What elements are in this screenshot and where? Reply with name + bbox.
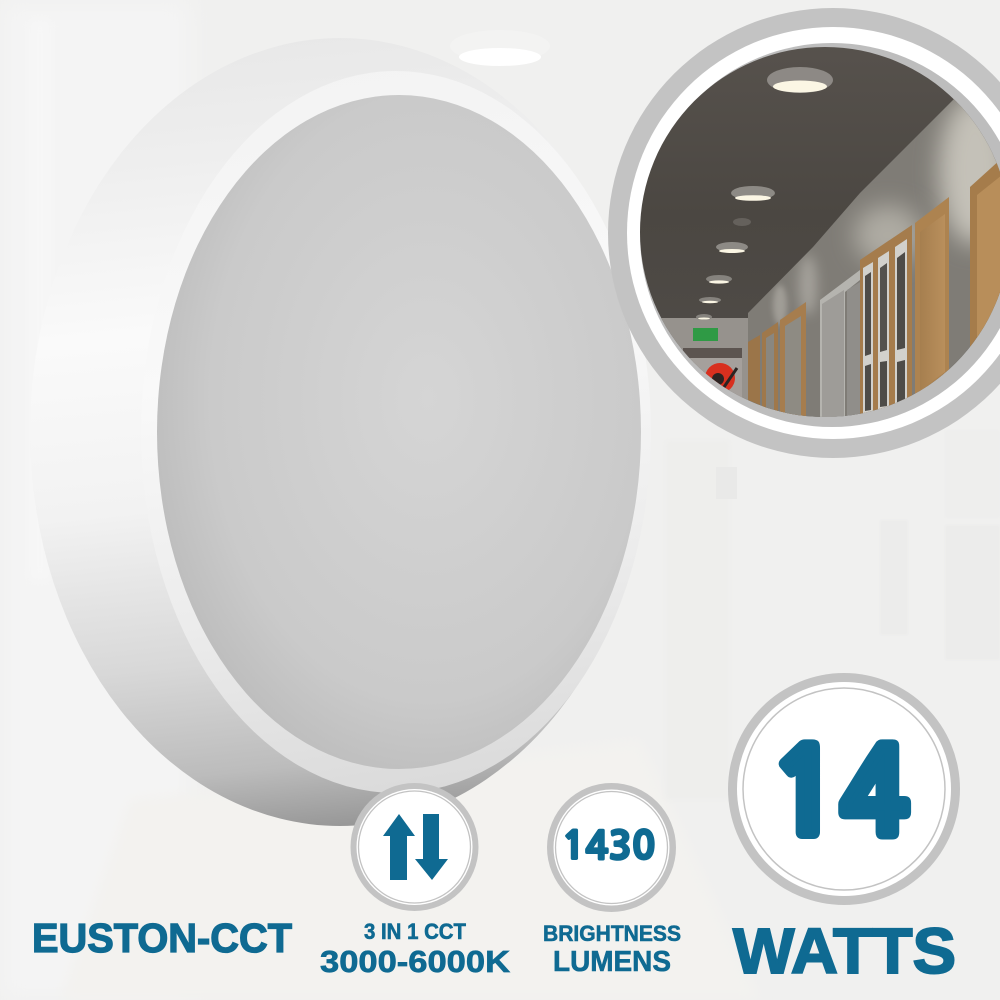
corridor photo: [630, 40, 1000, 430]
label: brightness: BRIGHTNESS: [543, 921, 681, 946]
doors and windows: [748, 158, 1000, 420]
badge: 14 watts: [728, 673, 960, 905]
label: 3 in 1 CCT: 3 IN 1 CCT: [364, 919, 467, 944]
product diffuser lens: [157, 95, 641, 769]
background ceiling light: [450, 30, 550, 66]
product front rim: [141, 71, 651, 793]
label: 3000-6000K: 3000-6000K: [320, 944, 511, 979]
inset outer grey ring: [608, 8, 1000, 458]
product: round bulkhead light: [30, 38, 651, 826]
wattage value: 14: [771, 734, 909, 851]
ceiling lights: [696, 67, 833, 320]
badge: 1430 lumens: [547, 783, 676, 912]
inset photo circle: corridor with ceiling lights: [608, 8, 1000, 458]
badge: colour temperature arrows: [350, 783, 478, 911]
label: lumens: LUMENS: [553, 946, 671, 978]
icon: down arrow: [415, 814, 448, 880]
label: watts: WATTS: [733, 915, 956, 987]
fire hose reel: [705, 363, 737, 393]
lumens value: 1430: [562, 827, 655, 865]
exit sign: [693, 328, 718, 341]
product outer body: [30, 38, 650, 826]
product name: EUSTON-CCT: [32, 915, 292, 961]
inset thin grey ring: [640, 43, 1000, 427]
inset white ring: [627, 27, 1000, 439]
icon: up arrow: [383, 814, 415, 880]
